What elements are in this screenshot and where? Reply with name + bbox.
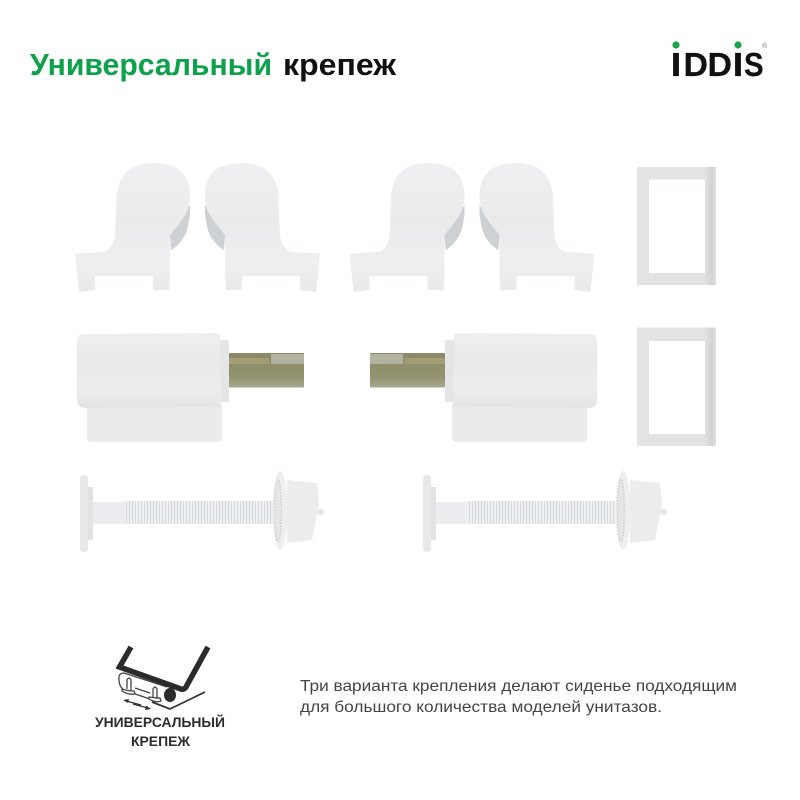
product: spacer frame, bottom xyxy=(637,328,716,446)
description text: для большого количества моделей унитазов. xyxy=(300,699,662,716)
title: крепеж xyxy=(283,47,397,82)
logo: IDDIS: D xyxy=(708,47,732,84)
product: right hinge cylinder xyxy=(370,333,597,442)
product: spacer frame, top xyxy=(637,167,716,285)
logo: IDDIS: ® xyxy=(762,42,768,50)
product: left hinge cylinder xyxy=(77,333,304,442)
title xyxy=(30,47,397,82)
product: clips, first pair xyxy=(75,163,320,292)
icon label: УНИВЕРСАЛЬНЫЙ xyxy=(95,715,225,730)
icon label xyxy=(95,715,225,749)
logo: IDDIS: I xyxy=(670,47,682,84)
logo: IDDIS: D xyxy=(684,47,708,84)
product: left bolt xyxy=(80,471,324,552)
logo: IDDIS xyxy=(670,41,768,84)
product: right bolt xyxy=(423,471,667,552)
title: Универсальный xyxy=(30,47,272,82)
description text: Три варианта крепления делают сиденье подходящим xyxy=(300,678,737,695)
logo: IDDIS: S xyxy=(744,47,764,84)
logo: IDDIS: I xyxy=(732,47,744,84)
icon: universal fastener xyxy=(119,647,208,710)
product: clips, second pair xyxy=(350,163,594,292)
icon label: КРЕПЕЖ xyxy=(131,734,191,749)
description text xyxy=(300,678,737,716)
